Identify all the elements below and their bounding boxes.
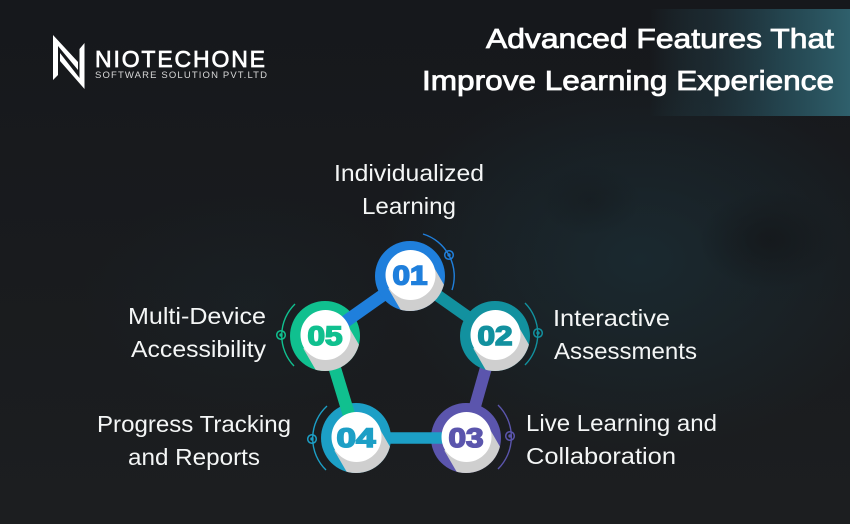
label: Live Learning and Collaboration	[526, 410, 717, 469]
connector 05 to 04	[325, 336, 356, 438]
connector 04 to 03	[356, 432, 466, 444]
label: Individualized Learning: Learning	[362, 193, 456, 219]
badge 02: 02	[478, 321, 512, 351]
ring 04	[321, 403, 390, 473]
logo wordmark: NIOTECHONE	[95, 46, 265, 72]
label: Individualized Learning: Individualized	[334, 160, 484, 186]
label: Interactive Assessments	[553, 305, 697, 364]
badge 05	[277, 304, 350, 366]
badge 05: 05	[308, 321, 342, 351]
title	[422, 23, 834, 96]
badge 04	[308, 406, 382, 470]
label: Multi-Device Accessibility: Multi-Device	[128, 303, 266, 329]
label: Interactive Assessments: Interactive	[553, 305, 670, 331]
label: Individualized Learning	[334, 160, 484, 219]
label: Multi-Device Accessibility	[128, 303, 267, 362]
title band	[650, 9, 850, 116]
pentagon diagram	[277, 234, 542, 485]
logo	[53, 35, 267, 89]
label: Progress Tracking and Reports: and Reports	[128, 444, 260, 470]
label: Multi-Device Accessibility: Accessibility	[131, 336, 267, 362]
badge 01: 01	[392, 260, 428, 290]
logo mark	[53, 35, 84, 89]
badge 01	[386, 234, 454, 300]
connector 03 to 02	[466, 336, 495, 438]
label: Progress Tracking and Reports	[97, 411, 291, 470]
title: Improve Learning Experience	[422, 65, 834, 96]
title: Advanced Features That	[486, 23, 834, 54]
ring 05	[290, 301, 360, 371]
connector 01 to 05	[325, 276, 410, 336]
badge 03	[442, 405, 514, 469]
label: Live Learning and Collaboration: Live Learning and	[526, 410, 717, 436]
badge 04: 04	[336, 423, 376, 453]
badge 02	[470, 303, 542, 365]
label: Progress Tracking and Reports: Progress Tracking	[97, 411, 291, 437]
logo tagline: SOFTWARE SOLUTION PVT.LTD	[95, 70, 267, 81]
badge 03: 03	[448, 423, 484, 453]
ring 03	[432, 403, 501, 473]
ring 02	[460, 301, 530, 371]
connector 02 to 01	[410, 276, 495, 336]
ring 01	[375, 241, 445, 311]
label: Live Learning and Collaboration: Collaboration	[526, 443, 676, 469]
label: Interactive Assessments: Assessments	[554, 338, 697, 364]
